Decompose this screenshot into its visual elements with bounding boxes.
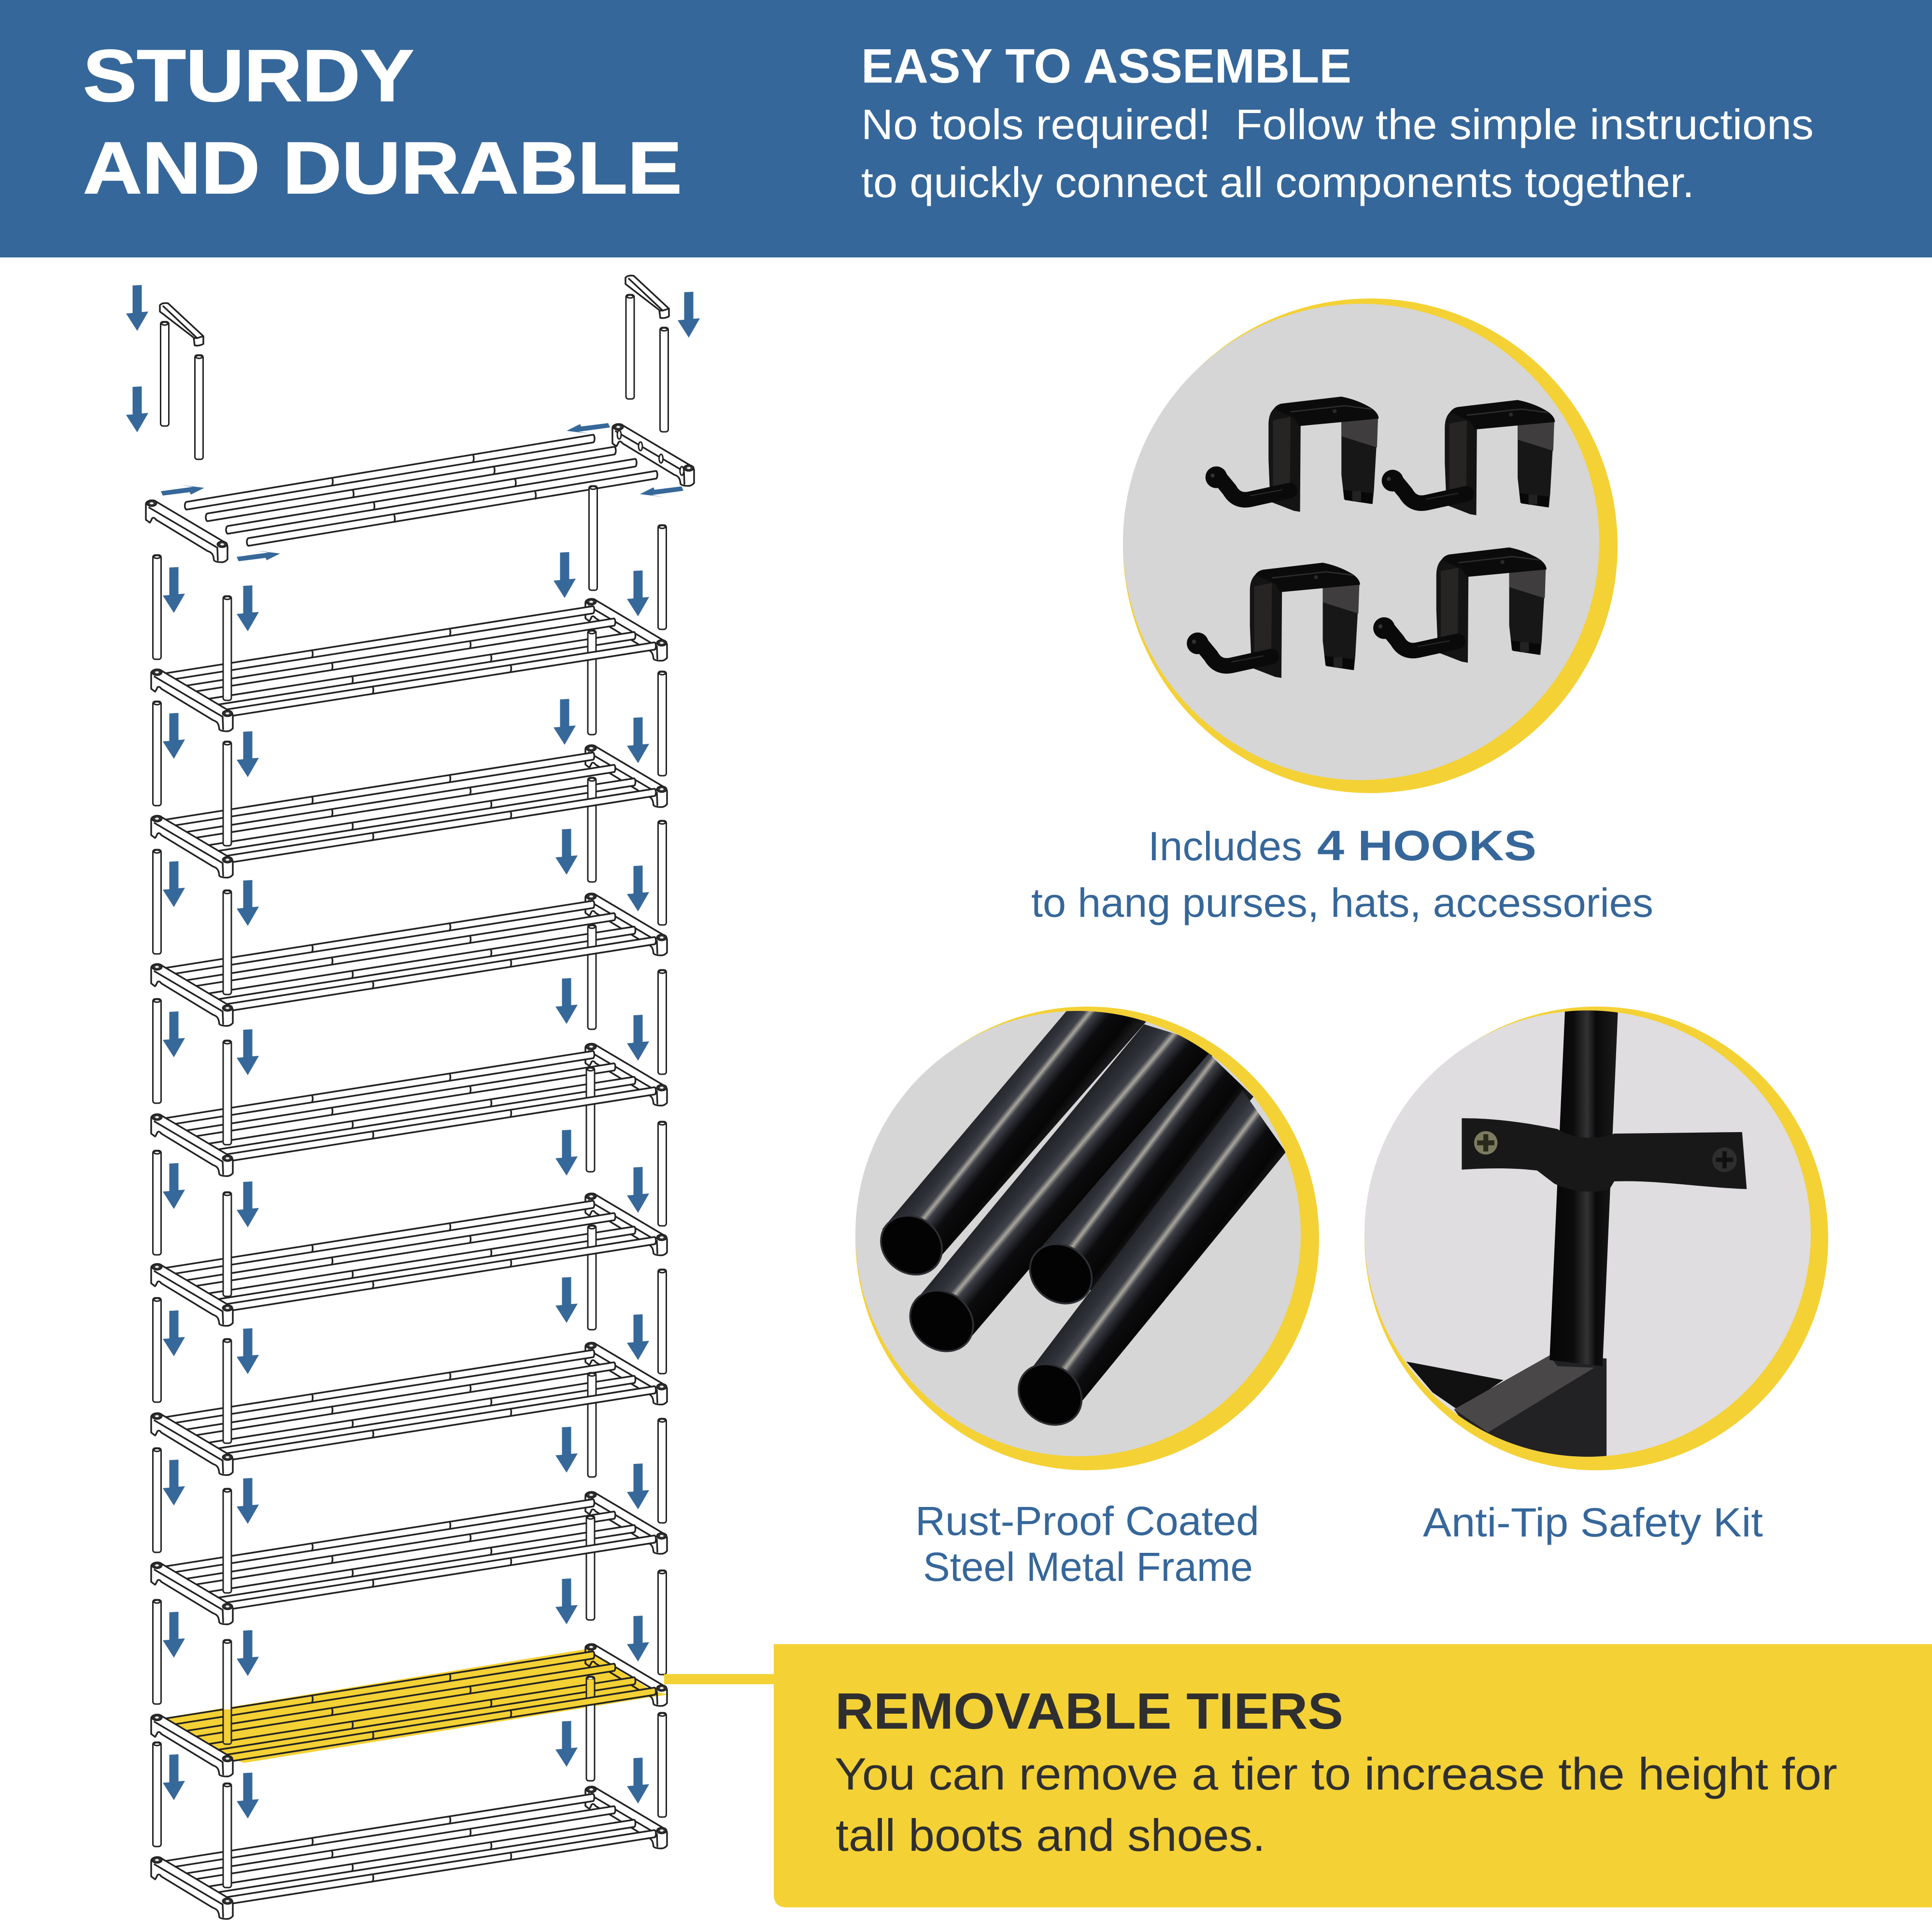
header text: easy to assemble: to quickly connect all components together. [861,158,1694,206]
title: AND DURABLE [83,127,682,209]
callout panel: removable tiers [774,1644,1932,1907]
top tier assembly [126,275,700,590]
callout heading: REMOVABLE TIERS [835,1683,1343,1740]
tier 3 [151,821,667,1029]
icon: four black tubes [869,1010,1286,1437]
yellow ring [855,1007,1319,1470]
icon: four hooks [1187,397,1555,678]
callout body [835,1748,1837,1861]
header text: easy to assemble: No tools required! Follow the simple instructions [861,100,1814,148]
tier 6 [151,1269,667,1477]
left bracket [146,500,227,562]
tier 7 [151,1419,667,1624]
small horizontal arrows [161,423,683,561]
tier 8: highlighted removable tier [151,1570,669,1781]
yellow ring [1364,1007,1828,1470]
assembly diagram [126,275,700,1919]
caption: hooks: 4 HOOKS [1317,822,1536,869]
photo circle: hooks [1123,298,1618,793]
tier 2 [151,671,667,882]
photo circle: metal tubes [855,1007,1319,1470]
tier 9 [151,1713,667,1919]
tier 1 [151,525,667,735]
title [83,35,682,209]
header text: easy to assemble: EASY TO ASSEMBLE [861,39,1351,93]
gray disc [1364,1010,1811,1457]
loose rods [185,435,657,546]
caption: hooks: to hang purses, hats, accessories [1031,880,1653,925]
connector from yellow tier to callout [664,1674,780,1684]
caption: frame [915,1498,1259,1590]
pole in front of rods [589,486,597,590]
callout body: tall boots and shoes. [836,1810,1265,1861]
icon: pole with strap [1406,1010,1747,1457]
caption: hooks: Includes [1148,824,1302,869]
tier 4 [151,970,667,1176]
header band [0,0,1932,257]
gray disc [855,1011,1301,1456]
caption: frame: Rust-Proof Coated [915,1498,1259,1544]
right bracket with holes [612,424,694,486]
caption: hooks [1031,822,1653,925]
caption: frame: Steel Metal Frame [923,1544,1253,1590]
gray disc [1123,304,1599,780]
arrows: top [126,285,700,432]
photo circle: anti-tip kit [1364,1007,1828,1470]
title: STURDY [83,35,414,117]
callout body: You can remove a tier to increase the height for [835,1748,1837,1799]
header text: easy to assemble [861,39,1814,206]
yellow ring [1123,298,1618,793]
tier 5 [151,1122,667,1330]
caption: anti-tip: Anti-Tip Safety Kit [1423,1500,1763,1545]
top caps and poles [160,275,669,459]
